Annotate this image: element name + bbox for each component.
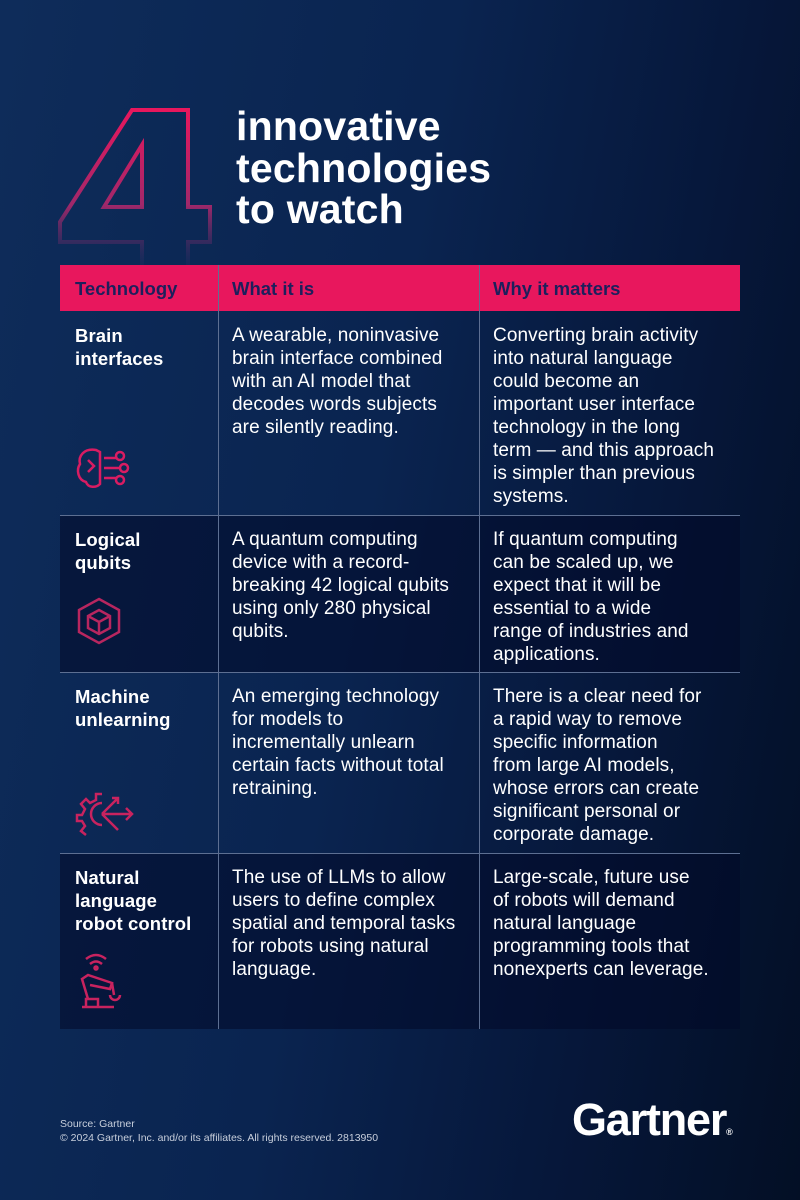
- row: natural language robot control: [60, 854, 740, 1029]
- row: logical qubits: Logical: [75, 529, 140, 550]
- title: innovative: [236, 103, 441, 149]
- row: machine unlearning: Machine: [75, 686, 150, 707]
- row: brain interfaces: Converting brain activity: [493, 325, 698, 346]
- row: brain interfaces: term — and this approach: [493, 440, 714, 461]
- row: brain interfaces: are silently reading.: [232, 417, 399, 438]
- row: brain interfaces: could become an: [493, 371, 639, 392]
- row: machine unlearning: There is a clear need for: [493, 686, 701, 707]
- row: machine unlearning: significant personal or: [493, 801, 680, 822]
- row: logical qubits: range of industries and: [493, 621, 689, 642]
- table header: What it is: [232, 278, 314, 299]
- row: natural language robot control: natural language: [493, 913, 636, 934]
- row: brain interfaces: into natural language: [493, 348, 673, 369]
- title: [236, 103, 491, 232]
- row: logical qubits: applications.: [493, 644, 600, 665]
- row: brain interfaces: interfaces: [75, 348, 163, 369]
- row: logical qubits: can be scaled up, we: [493, 552, 674, 573]
- row: natural language robot control: nonexperts can leverage.: [493, 959, 709, 980]
- row: logical qubits: A quantum computing: [232, 529, 418, 550]
- row: machine unlearning: specific information: [493, 732, 658, 753]
- row: brain interfaces: [60, 311, 740, 516]
- title: technologies: [236, 144, 491, 190]
- table header: Technology: [75, 278, 177, 299]
- row: logical qubits: expect that it will be: [493, 575, 661, 596]
- row: natural language robot control: for robots using natural: [232, 936, 429, 957]
- table header: Why it matters: [493, 278, 620, 299]
- row: logical qubits: essential to a wide: [493, 598, 651, 619]
- row: machine unlearning: unlearning: [75, 709, 171, 730]
- row: natural language robot control: programming tools that: [493, 936, 690, 957]
- row: brain interfaces: with an AI model that: [232, 371, 410, 392]
- row: logical qubits: device with a record-: [232, 552, 409, 573]
- big number 4 outline: [58, 108, 212, 264]
- row: brain interfaces: is simpler than previous: [493, 463, 695, 484]
- row: natural language robot control: Large-scale, future use: [493, 867, 690, 888]
- row: machine unlearning: certain facts without total: [232, 755, 444, 776]
- row: logical qubits: qubits.: [232, 621, 289, 642]
- row: natural language robot control: language.: [232, 959, 316, 980]
- icon: gear with arrows: [76, 792, 134, 836]
- table header: [60, 265, 740, 311]
- row: natural language robot control: language: [75, 890, 157, 911]
- row: machine unlearning: a rapid way to remove: [493, 709, 682, 730]
- row: logical qubits: If quantum computing: [493, 529, 678, 550]
- row: logical qubits: breaking 42 logical qubits: [232, 575, 449, 596]
- row: machine unlearning: [60, 673, 740, 854]
- row: brain interfaces: A wearable, noninvasive: [232, 325, 439, 346]
- row: brain interfaces: technology in the long: [493, 417, 680, 438]
- row: machine unlearning: An emerging technology: [232, 686, 439, 707]
- row: machine unlearning: incrementally unlearn: [232, 732, 415, 753]
- row: logical qubits: qubits: [75, 552, 131, 573]
- row: brain interfaces: systems.: [493, 486, 569, 507]
- row: natural language robot control: of robots will demand: [493, 890, 675, 911]
- title: to watch: [236, 186, 404, 232]
- row: logical qubits: using only 280 physical: [232, 598, 431, 619]
- icon: brain: [76, 448, 130, 488]
- row: brain interfaces: important user interface: [493, 394, 695, 415]
- row: machine unlearning: whose errors can create: [493, 778, 699, 799]
- row: natural language robot control: robot control: [75, 913, 191, 934]
- table: [60, 265, 740, 1029]
- row: machine unlearning: corporate damage.: [493, 824, 654, 845]
- row: logical qubits: [60, 516, 740, 673]
- row: natural language robot control: Natural: [75, 867, 139, 888]
- row: brain interfaces: brain interface combined: [232, 348, 442, 369]
- row: brain interfaces: Brain: [75, 325, 123, 346]
- row: natural language robot control: users to define complex: [232, 890, 435, 911]
- icon: cube: [78, 598, 120, 644]
- row: machine unlearning: from large AI models,: [493, 755, 675, 776]
- footer source text: [60, 1118, 378, 1144]
- row: natural language robot control: spatial and temporal tasks: [232, 913, 455, 934]
- icon: robot arm: [80, 954, 122, 1008]
- row: machine unlearning: retraining.: [232, 778, 318, 799]
- footer source text: © 2024 Gartner, Inc. and/or its affiliates. All rights reserved. 2813950: [60, 1132, 378, 1144]
- footer source text: Source: Gartner: [60, 1118, 135, 1130]
- logo: Gartner: Gartner®: [572, 1094, 733, 1145]
- row: machine unlearning: for models to: [232, 709, 343, 730]
- row: brain interfaces: decodes words subjects: [232, 394, 437, 415]
- row: natural language robot control: The use of LLMs to allow: [232, 867, 446, 888]
